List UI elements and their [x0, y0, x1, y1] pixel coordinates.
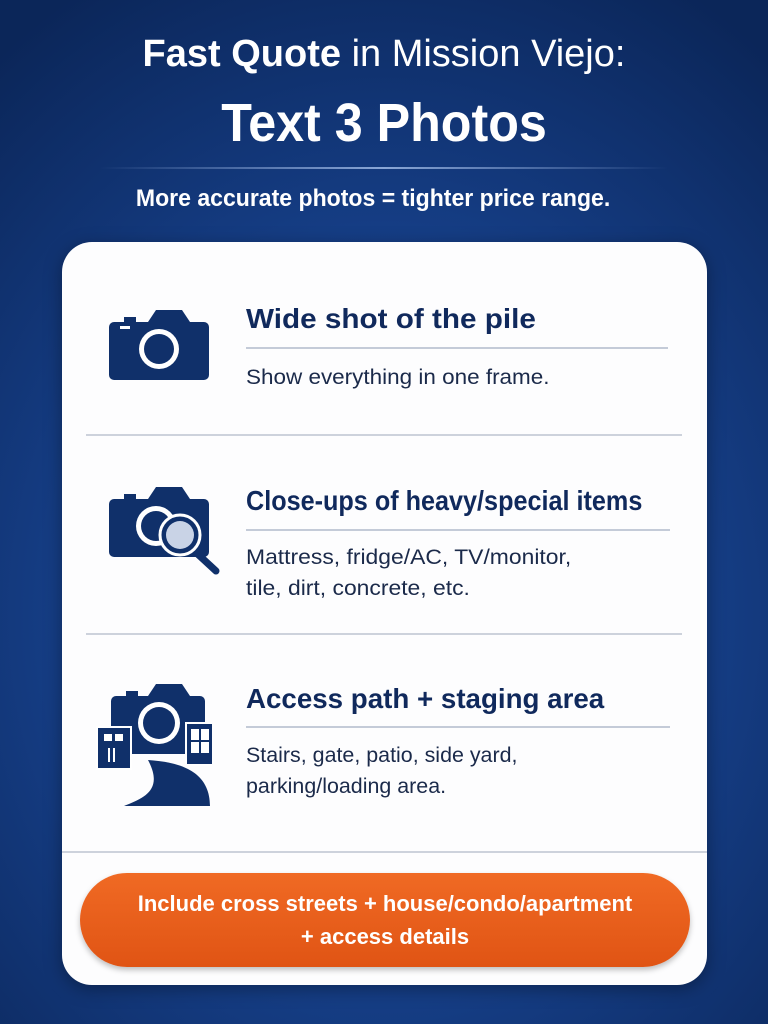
icon: camera with buildings and path: [98, 684, 212, 806]
title line 1: Fast Quote in Mission Viejo:: [143, 33, 625, 75]
text 3: [246, 744, 517, 798]
text 1: Show everything in one frame.: [246, 366, 550, 389]
panel: card: [62, 242, 707, 985]
icon: camera with magnifier: [109, 487, 220, 574]
callout button: [80, 873, 690, 967]
icon: camera: [109, 310, 209, 380]
text 3: parking/loading area.: [246, 775, 446, 798]
callout button: + access details: [301, 924, 469, 949]
text 3: Stairs, gate, patio, side yard,: [246, 744, 517, 767]
text 2: tile, dirt, concrete, etc.: [246, 577, 470, 600]
subtitle: More accurate photos = tighter price range.: [136, 185, 610, 212]
text 2: Mattress, fridge/AC, TV/monitor,: [246, 546, 571, 569]
heading 2: Close-ups of heavy/special items: [246, 485, 642, 516]
heading 1: Wide shot of the pile: [246, 303, 536, 334]
title line 2: Text 3 Photos: [221, 93, 547, 153]
heading 3: Access path + staging area: [246, 683, 604, 714]
text 2: [246, 546, 571, 600]
callout button: Include cross streets + house/condo/apartment: [138, 891, 632, 916]
